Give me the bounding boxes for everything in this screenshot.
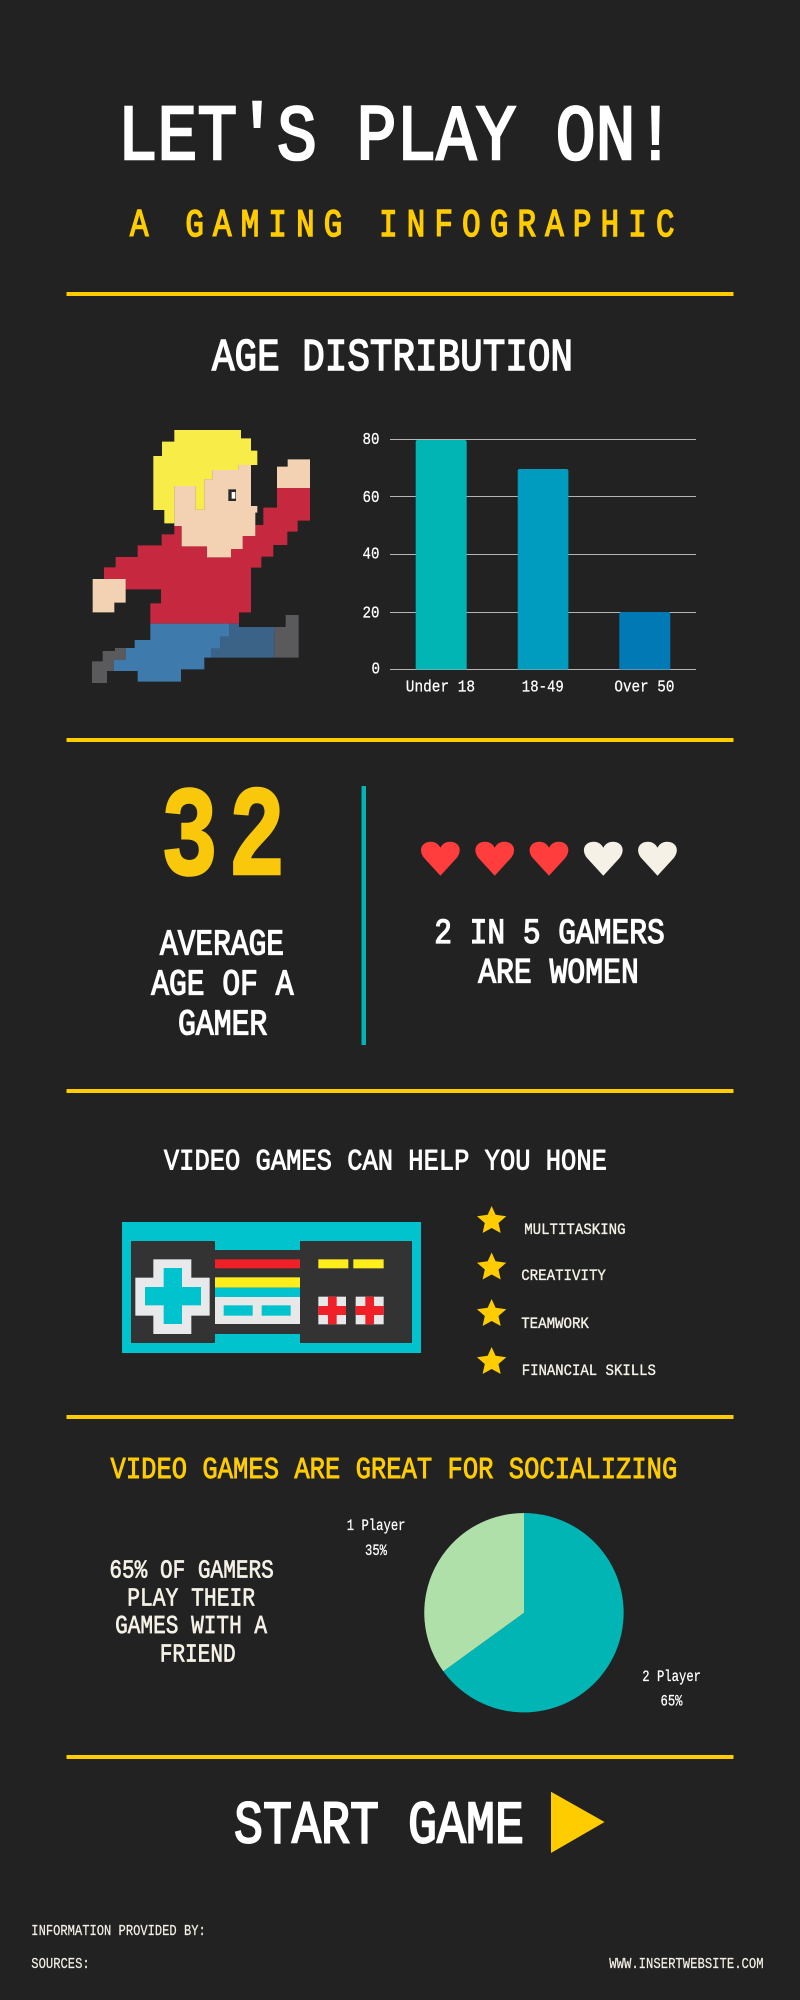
bar: over 50 [619,612,670,670]
illustration: running pixel boy [92,430,310,683]
stat caption [151,924,294,1046]
footer: website: WWW.INSERTWEBSITE.COM [609,1957,764,1973]
label: 1 player: 35% [365,1542,388,1560]
text block: 65% of gamers [109,1556,274,1670]
call to action: start game: START GAME [234,1794,524,1862]
icon row: hearts [421,842,677,876]
item: teamwork [477,1299,590,1333]
stat: women gamers [421,842,677,994]
label: 1 player: 1 Player [347,1517,406,1535]
x axis labels: Under 18 [406,678,475,696]
slice: 1 player 35% [424,1513,524,1671]
y axis labels [362,430,380,679]
stat caption: GAMER [178,1004,267,1046]
stat caption: ARE WOMEN [478,954,639,994]
heading: age distribution: AGE DISTRIBUTION [212,333,573,384]
illustration: game controller [122,1222,421,1353]
bar chart: age distribution [362,430,696,696]
icon: play arrow [551,1792,605,1853]
stat caption: 2 IN 5 GAMERS [434,914,665,954]
item: multitasking: MULTITASKING [524,1221,626,1239]
stat caption [434,914,665,994]
x axis labels [406,678,674,696]
item: multitasking [477,1206,626,1239]
stat caption: AGE OF A [151,964,294,1006]
item: financial skills: FINANCIAL SKILLS [522,1362,656,1380]
slice: 2 player 65% [443,1513,624,1712]
text block: 65% of gamers: 65% OF GAMERS [109,1556,274,1586]
heading: socializing: VIDEO GAMES ARE GREAT FOR SOCIALIZING [110,1453,677,1488]
text block: 65% of gamers: PLAY THEIR [127,1584,255,1614]
footer: information: INFORMATION PROVIDED BY: [31,1924,206,1940]
x axis labels: Over 50 [614,678,674,696]
label: 2 player: 2 Player [642,1668,701,1686]
item: teamwork: TEAMWORK [521,1315,590,1333]
label: 2 player: 65% [660,1693,683,1711]
stat: average age [151,767,296,1046]
heading: skills: VIDEO GAMES CAN HELP YOU HONE [164,1146,607,1180]
list: skills [477,1206,656,1380]
y axis labels: 40 [362,545,380,564]
y axis labels: 0 [372,660,380,679]
text block: 65% of gamers: FRIEND [160,1640,236,1670]
pie chart: players [347,1513,701,1712]
item: creativity: CREATIVITY [521,1267,607,1285]
big number 32: 32 [161,767,296,913]
x axis labels: 18-49 [522,678,564,696]
subtitle: A GAMING INFOGRAPHIC [130,205,684,248]
bar: under 18 [416,440,467,670]
y axis labels: 20 [362,604,380,623]
item: financial skills [477,1347,656,1380]
label: 2 player [642,1668,701,1711]
title: LET'S PLAY ON! [118,93,675,183]
footer: sources: SOURCES: [31,1957,90,1973]
bar: 18-49 [518,469,568,670]
y axis labels: 80 [362,430,380,449]
text block: 65% of gamers: GAMES WITH A [115,1612,268,1641]
item: creativity [477,1252,607,1285]
stat caption: AVERAGE [160,924,284,966]
y axis labels: 60 [362,488,380,507]
label: 1 player [347,1517,406,1560]
